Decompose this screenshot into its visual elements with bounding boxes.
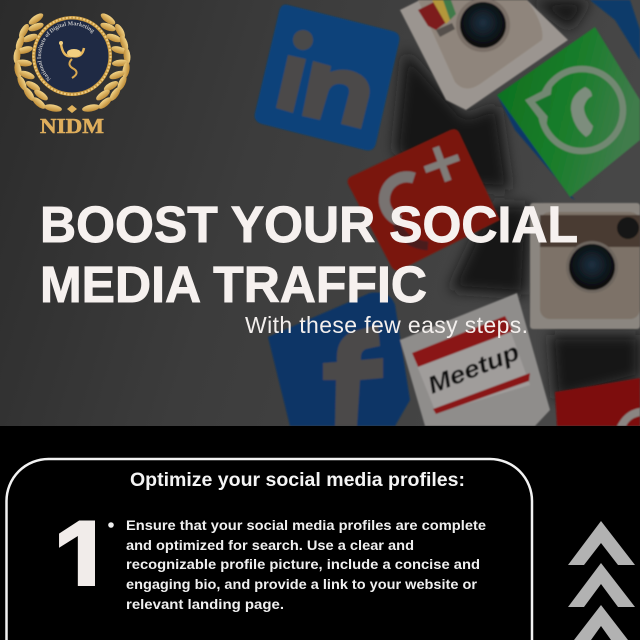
photo icons	[255, 0, 640, 426]
icon: facebook block	[268, 292, 410, 426]
logo: NIDM crest	[14, 13, 130, 138]
title: BOOST YOUR SOCIAL	[40, 196, 578, 253]
step body text: and optimized for search. Use a clear and	[126, 537, 414, 553]
title	[40, 196, 578, 313]
icon: upward chevrons	[568, 521, 635, 640]
icon: instagram block lower	[530, 203, 640, 329]
logo laurel right	[82, 11, 131, 113]
step heading: Optimize your social media profiles:	[130, 470, 465, 491]
title: MEDIA TRAFFIC	[40, 256, 427, 313]
icon: google plus block	[348, 129, 500, 270]
logo wordmark: NIDM	[40, 114, 104, 138]
bullet	[108, 522, 114, 528]
panel: step 1	[6, 459, 532, 640]
icon: instagram block top	[400, 0, 568, 110]
logo centre diamond	[67, 105, 77, 113]
logo laurel left	[13, 11, 62, 113]
icon: linkedin block	[255, 5, 399, 150]
panel outline	[6, 459, 532, 640]
icon: meetup badge	[400, 293, 550, 426]
hero photo background	[0, 0, 640, 426]
lower black section	[0, 426, 640, 640]
step body text: relevant landing page.	[126, 596, 284, 612]
icon: meetup badge: Meetup	[424, 339, 523, 400]
step body text: recognizable profile picture, include a concise and	[126, 556, 480, 572]
step number: 1	[52, 498, 115, 625]
subtitle: With these few easy steps.	[245, 312, 528, 338]
icon: blue cube corner	[590, 0, 640, 60]
logo ring text: National Institute of Digital Marketing	[37, 21, 94, 82]
icon: whatsapp block	[497, 27, 640, 197]
step body text	[126, 517, 486, 612]
step body text: engaging bio, and provide a link to your website or	[126, 576, 478, 592]
step number base mask	[40, 586, 120, 606]
step body text: Ensure that your social media profiles are complete	[126, 517, 486, 533]
icon: red block bottom right	[555, 378, 640, 426]
